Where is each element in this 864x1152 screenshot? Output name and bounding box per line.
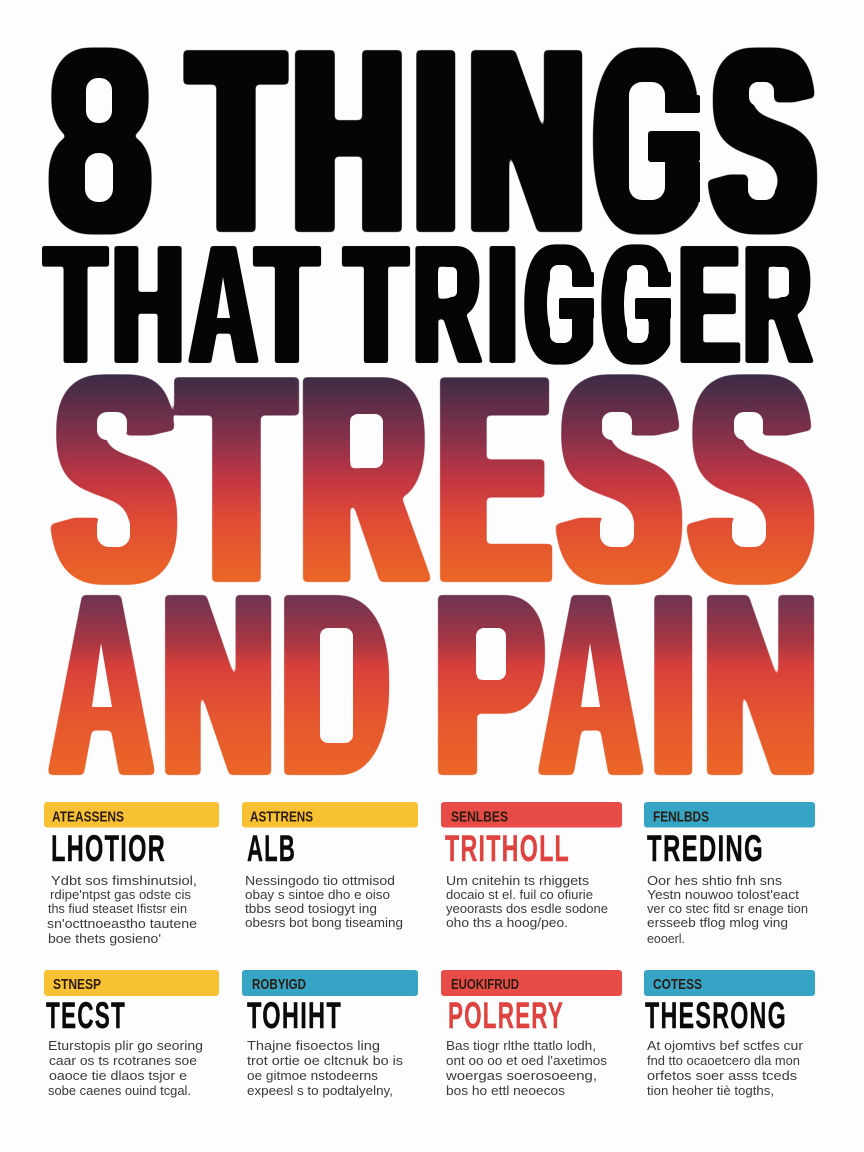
body text: Ydbt sos fimshinutsiol, — [51, 874, 197, 888]
body text: At ojomtivs bef sctfes cur — [647, 1039, 803, 1053]
title line: THAT TRIGGER: R — [414, 213, 479, 398]
body text: ver co stec fitd sr enage tion — [647, 902, 808, 916]
letter counters — [85, 78, 789, 743]
panel: card 8 — [644, 970, 815, 1098]
title line: AND PAIN: N — [705, 544, 817, 826]
body text: ersseeb tflog mlog ving — [647, 916, 788, 930]
title line: 8 THINGS: G — [597, 0, 698, 283]
body text — [245, 874, 403, 930]
title line: THAT TRIGGER — [46, 210, 810, 399]
body text: woergas soerosoeeng, — [445, 1069, 597, 1083]
title line: THAT TRIGGER: E — [680, 212, 739, 398]
tag bar — [242, 802, 418, 828]
panel: card 5 — [44, 970, 219, 1098]
title line: AND PAIN: P — [435, 543, 543, 826]
panel: card 4 — [644, 802, 815, 946]
title line: THAT TRIGGER: G — [603, 212, 671, 398]
heading: POLRERY — [448, 994, 564, 1036]
title line: AND PAIN: I — [652, 544, 694, 827]
heading: TOHIHT — [247, 994, 342, 1036]
body text: eooerl. — [647, 932, 685, 946]
title line: THAT TRIGGER: H — [113, 210, 183, 397]
panel: card 7 — [441, 970, 622, 1098]
title line: 8 THINGS: H — [294, 0, 403, 284]
title line: 8 THINGS: I — [416, 0, 456, 284]
body text: Eturstopis plir go seoring — [48, 1039, 203, 1053]
title line: STRESS: S — [563, 319, 677, 641]
title line: AND PAIN: A — [53, 543, 150, 826]
body text — [247, 1039, 403, 1098]
panel: card 3 — [441, 802, 622, 930]
tag bar — [242, 970, 418, 996]
title line: THAT TRIGGER: I — [487, 212, 518, 399]
body text: sn'octtnoeastho tautene — [47, 917, 197, 931]
title line: 8 THINGS: T — [191, 0, 281, 284]
body text: Yestn nouwoo tolost'eact — [647, 888, 800, 902]
body text: rdipe'ntpst gas odste cis — [50, 888, 191, 902]
body text: boe thets gosieno' — [48, 932, 161, 946]
body text — [647, 1039, 803, 1098]
title line: THAT TRIGGER: T — [346, 212, 406, 399]
tag label: ATEASSENS — [52, 808, 124, 826]
panel: card 6 — [242, 970, 418, 1098]
body text: Oor hes shtio fnh sns — [647, 874, 782, 888]
tag label: FENLBDS — [653, 808, 709, 826]
body text: caar os ts rcotranes soe — [49, 1054, 197, 1068]
title line: THAT TRIGGER: R — [744, 211, 810, 398]
title line: STRESS: S — [694, 319, 809, 641]
tag bar — [441, 970, 622, 996]
letter G crossbars — [559, 95, 700, 319]
body text: sobe caenes ouind tcgal. — [48, 1084, 191, 1098]
body text: bos ho ettl neoecos — [446, 1084, 565, 1098]
body text — [48, 1039, 203, 1098]
tag label: ASTTRENS — [250, 808, 313, 826]
title — [46, 0, 817, 827]
body text: ths fiud steaset Ifistsr ein — [48, 902, 187, 916]
body text: expeesl s to podtalyelny, — [247, 1084, 393, 1098]
tag label: ROBYIGD — [252, 976, 306, 993]
panel: card 1 — [44, 802, 219, 946]
title line: AND PAIN: N — [163, 545, 274, 826]
tag bar — [441, 802, 622, 828]
title line: STRESS — [58, 318, 809, 641]
body text — [446, 874, 608, 930]
tag bar — [644, 802, 815, 828]
title line: THAT TRIGGER: T — [46, 210, 105, 397]
tag label: SENLBES — [451, 808, 508, 826]
heading: TECST — [46, 994, 126, 1036]
body text: Um cnitehin ts rhiggets — [446, 874, 589, 888]
body text: ont oo oo et oed l'axetimos — [446, 1054, 607, 1068]
body text: obay s sintoe dho e oiso — [245, 888, 390, 902]
body text: Thajne fisoectos ling — [247, 1039, 380, 1053]
title line: STRESS: T — [184, 319, 289, 641]
body text: oho ths a hoog/peo. — [446, 916, 568, 930]
body text: tion heoher tiè togths, — [647, 1084, 774, 1098]
title line: THAT TRIGGER: A — [191, 213, 256, 398]
tag bar — [44, 802, 219, 828]
body text — [647, 874, 808, 946]
title line: 8 THINGS: N — [469, 0, 584, 284]
title line: THAT TRIGGER: G — [526, 212, 594, 398]
body text: orfetos soer asss tceds — [647, 1069, 797, 1083]
tag label: COTESS — [653, 976, 702, 993]
tag label: EUOKIFRUD — [451, 976, 519, 993]
heading: LHOTIOR — [51, 827, 166, 869]
tag bar — [44, 970, 219, 996]
title line: STRESS: E — [442, 318, 546, 641]
body text: oaoce tie dlaos tsjor e — [49, 1069, 187, 1083]
body text: Bas tiogr rlthe ttatlo lodh, — [446, 1039, 596, 1053]
body text: obesrs bot bong tiseaming — [245, 916, 403, 930]
title line: 8 THINGS: 8 — [52, 0, 148, 284]
body text: tbbs seod tosiogyt ing — [245, 902, 377, 916]
body text: oe gitmoe nstodeerns — [247, 1069, 378, 1083]
title line: STRESS: R — [304, 318, 422, 641]
heading: ALB — [247, 827, 296, 869]
title line: AND PAIN: A — [543, 543, 639, 826]
heading: TRITHOLL — [445, 827, 570, 869]
title line: STRESS: S — [58, 319, 172, 641]
body text: docaio st el. fuil co ofiurie — [446, 888, 593, 902]
title line: AND PAIN: D — [282, 543, 387, 826]
body text: fnd tto ocaoetcero dla mon — [647, 1054, 800, 1068]
body text — [445, 1039, 607, 1098]
body text: Nessingodo tio ottmisod — [245, 874, 395, 888]
title line: 8 THINGS: S — [712, 0, 814, 284]
body text — [47, 874, 197, 946]
body text: yeoorasts dos esdle sodone — [446, 902, 608, 916]
tag bar — [644, 970, 815, 996]
body text: trot ortie oe cltcnuk bo is — [247, 1054, 403, 1068]
title line: AND PAIN — [53, 543, 817, 827]
heading: TREDING — [647, 827, 764, 869]
tag label: STNESP — [53, 976, 101, 993]
panel: card 2 — [242, 802, 418, 930]
title line: THAT TRIGGER: T — [257, 212, 317, 399]
title line: 8 THINGS — [52, 0, 814, 284]
